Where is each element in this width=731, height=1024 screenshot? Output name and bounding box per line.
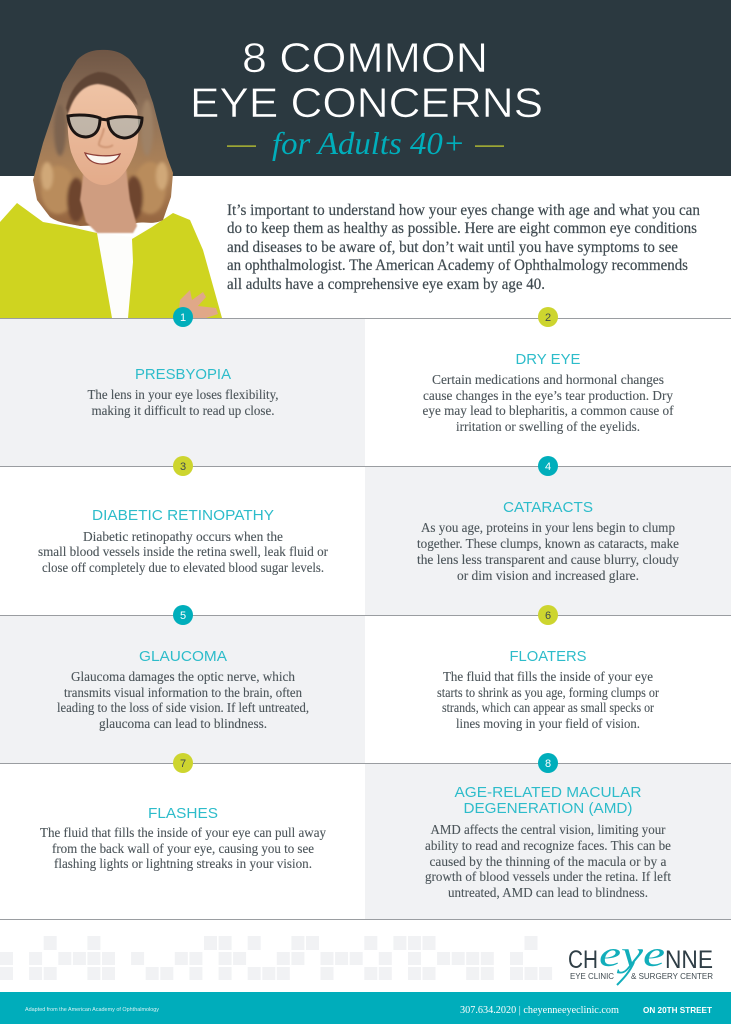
intro paragraph: and diseases to be aware of, but don’t wait until you have symptoms to see <box>227 239 678 256</box>
footer band <box>0 992 731 1024</box>
panel: 2 dry eye: DRY EYE <box>516 351 580 368</box>
title: 8 COMMON <box>242 34 488 81</box>
logo: Cheyenne Eye Clinic & Surgery Center <box>568 934 713 985</box>
intro paragraph: It’s important to understand how your eyes change with age and what you can <box>227 202 700 219</box>
crossed hand <box>178 290 218 318</box>
logo: Cheyenne Eye Clinic & Surgery Center: eye <box>599 934 665 974</box>
intro paragraph <box>227 202 700 293</box>
portrait of smiling woman in glasses and yellow cardigan <box>0 50 222 318</box>
curls <box>41 100 168 222</box>
panel: 8 age-related macular degeneration: growth of blood vessels under the retina. If left <box>425 870 671 885</box>
panel: 8 age-related macular degeneration: ability to read and recognize faces. This can be <box>425 839 671 854</box>
number badge 6 <box>538 605 558 625</box>
panel: 6 floaters <box>437 648 659 732</box>
panel: 3 diabetic retinopathy: Diabetic retinopathy occurs when the <box>83 530 283 545</box>
footer band: 307.634.2020 | cheyenneeyeclinic.com <box>460 1004 619 1016</box>
number badge 5: 5 <box>180 610 186 622</box>
footer band: Adapted from the American Academy of Ophthalmology <box>25 1007 159 1013</box>
panel: 5 glaucoma: leading to the loss of side vision. If left untreated, <box>57 701 309 716</box>
panel: 7 flashes <box>40 805 326 872</box>
panel: 7 flashes: The fluid that fills the inside of your eye can pull away <box>40 826 326 841</box>
panel: 8 age-related macular degeneration <box>365 763 731 919</box>
panel: 2 dry eye: eye may lead to blepharitis, a common cause of <box>422 404 674 419</box>
panel: 2 dry eye: Certain medications and hormonal changes <box>432 373 664 388</box>
subtitle: for Adults 40+ <box>272 125 465 161</box>
panel: 7 flashes: from the back wall of your eye, causing you to see <box>52 842 314 857</box>
number badge 5 <box>173 605 193 625</box>
panel: 3 diabetic retinopathy <box>38 507 328 576</box>
number badge 8 <box>538 753 558 773</box>
panel: 4 cataracts: CATARACTS <box>503 499 593 516</box>
number badge 1 <box>173 307 193 327</box>
number badge 8: 8 <box>545 758 551 770</box>
panel: 2 dry eye: irritation or swelling of the eyelids. <box>456 420 640 435</box>
panel: 5 glaucoma: Glaucoma damages the optic nerve, which <box>71 670 295 685</box>
header band <box>0 0 731 176</box>
smile <box>85 153 120 164</box>
number badge 7: 7 <box>180 758 186 770</box>
number badge 3: 3 <box>180 461 186 473</box>
hair <box>33 50 173 226</box>
panel: 6 floaters: starts to shrink as you age, forming clumps or <box>437 686 659 701</box>
logo: Cheyenne Eye Clinic & Surgery Center: NNE <box>665 946 713 974</box>
number badge 4: 4 <box>545 461 551 473</box>
panel: 5 glaucoma: glaucoma can lead to blindness. <box>99 717 267 732</box>
nose <box>99 128 113 147</box>
number badge 2: 2 <box>545 312 551 324</box>
intro paragraph: all adults have a comprehensive eye exam by age 40. <box>227 276 545 293</box>
panel: 8 age-related macular degeneration: caused by the thinning of the macula or by a <box>430 855 667 870</box>
panel: 4 cataracts: the lens less transparent and cause blurry, cloudy <box>417 553 679 568</box>
number badge 3 <box>173 456 193 476</box>
panel: 7 flashes: FLASHES <box>148 805 218 822</box>
panel: 5 glaucoma <box>0 615 365 763</box>
yellow cardigan <box>0 203 112 318</box>
number badge 7 <box>173 753 193 773</box>
panel: 5 glaucoma: GLAUCOMA <box>139 648 227 665</box>
number badge 1: 1 <box>180 312 186 324</box>
intro paragraph: do to keep them as healthy as possible. Here are eight common eye conditions <box>227 220 697 237</box>
title <box>190 34 543 126</box>
panel: 2 dry eye: cause changes in the eye’s tear production. Dry <box>423 389 673 404</box>
panel: 6 floaters: The fluid that fills the inside of your eye <box>443 670 653 685</box>
panel: 8 age-related macular degeneration: DEGENERATION (AMD) <box>464 800 632 817</box>
panel: 5 glaucoma: transmits visual information to the brain, often <box>64 686 302 701</box>
panel: 1 presbyopia <box>0 319 365 466</box>
panel: 4 cataracts: or dim vision and increased glare. <box>457 569 639 584</box>
neck and chest <box>80 168 137 233</box>
panel: 3 diabetic retinopathy: small blood vessels inside the retina swell, leak fluid or <box>38 545 328 560</box>
panel: 3 diabetic retinopathy: close off completely due to elevated blood sugar levels. <box>42 561 324 576</box>
panel: 8 age-related macular degeneration: untreated, AMD can lead to blindness. <box>448 886 648 901</box>
panel: 1 presbyopia: making it difficult to read up close. <box>92 404 274 419</box>
logo: Cheyenne Eye Clinic & Surgery Center: & SURGERY CENTER <box>631 971 713 981</box>
panel: 8 age-related macular degeneration: AMD affects the central vision, limiting your <box>430 823 666 838</box>
panel: 2 dry eye <box>422 351 674 435</box>
footer band: ON 20TH STREET <box>643 1005 713 1015</box>
glasses <box>68 115 142 138</box>
title: EYE CONCERNS <box>190 79 543 126</box>
panel: 6 floaters: lines moving in your field of vision. <box>456 717 640 732</box>
panel: 1 presbyopia: The lens in your eye loses flexibility, <box>88 388 278 403</box>
panel: 7 flashes: flashing lights or lightning streaks in your vision. <box>54 857 312 872</box>
number badge 6: 6 <box>545 610 551 622</box>
white shirt <box>65 221 152 318</box>
number badge 2 <box>538 307 558 327</box>
panel: 4 cataracts: together. These clumps, known as cataracts, make <box>417 537 679 552</box>
panel: 6 floaters: strands, which can appear as small specks or <box>442 701 654 716</box>
panel: 1 presbyopia: PRESBYOPIA <box>135 366 231 383</box>
panel: 4 cataracts <box>365 466 731 615</box>
number badge 4 <box>538 456 558 476</box>
face <box>68 82 138 185</box>
panel: 8 age-related macular degeneration: AGE-RELATED MACULAR <box>454 784 642 801</box>
logo: Cheyenne Eye Clinic & Surgery Center: EYE CLINIC <box>570 971 614 981</box>
logo: Cheyenne Eye Clinic & Surgery Center: CH <box>568 946 598 974</box>
intro paragraph: an ophthalmologist. The American Academy of Ophthalmology recommends <box>227 257 688 274</box>
hair fringe <box>66 72 138 114</box>
panel: 6 floaters: FLOATERS <box>510 648 586 665</box>
panel: 3 diabetic retinopathy: DIABETIC RETINOPATHY <box>92 507 274 524</box>
panel: 4 cataracts: As you age, proteins in your lens begin to clump <box>421 521 675 536</box>
